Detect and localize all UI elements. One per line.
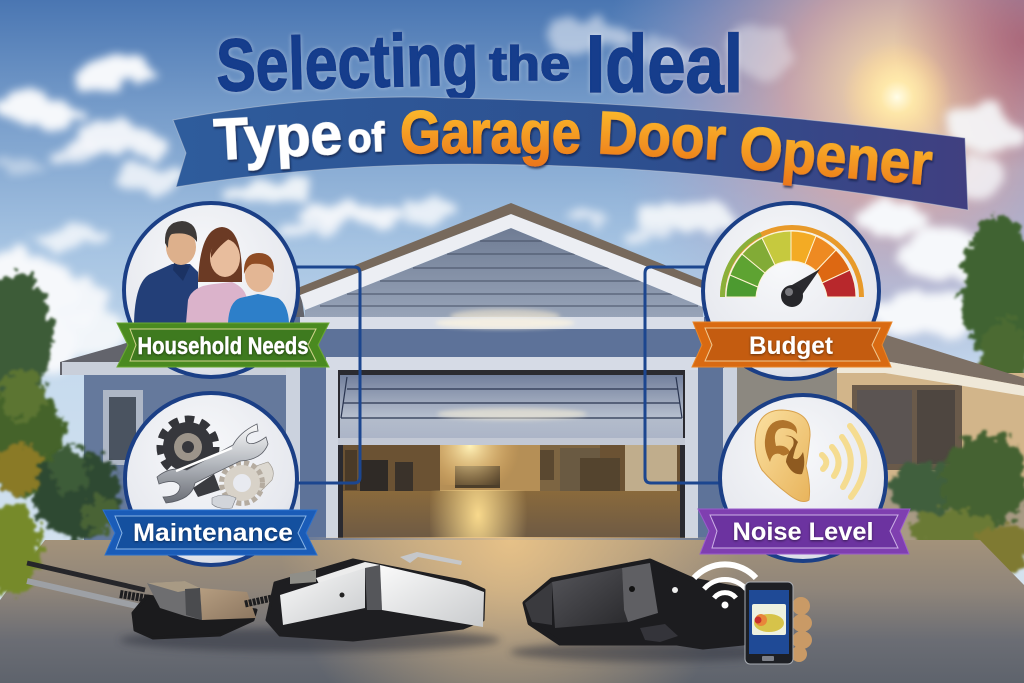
boy (228, 253, 289, 323)
hand fingers (791, 597, 812, 662)
sound waves (822, 426, 864, 497)
wrench (157, 424, 268, 503)
small silver cog (212, 462, 273, 508)
side panel (552, 568, 628, 628)
title: selecting the ideal: the (489, 38, 570, 91)
circle: noise level (720, 395, 886, 561)
label: Maintenance (133, 519, 293, 547)
banner title text: Opener (737, 114, 935, 198)
opener: chain drive with rails (27, 552, 484, 640)
opener: smart wifi unit (525, 561, 812, 664)
gear and wrench icon (157, 420, 273, 508)
ribbon: maintenance (103, 510, 317, 555)
light panel (622, 563, 658, 622)
end cap (525, 582, 552, 625)
opener shadows (120, 628, 790, 662)
title: selecting the ideal (215, 17, 743, 110)
label: Budget (749, 332, 834, 360)
ribbon banner (173, 97, 968, 210)
circle: household needs (124, 203, 298, 377)
circle: maintenance (125, 393, 297, 565)
woman (186, 227, 247, 323)
man (134, 221, 198, 323)
rails (27, 563, 167, 609)
connector lines (295, 267, 722, 483)
title: selecting the ideal: Selecting (215, 17, 479, 107)
trim bands (300, 317, 704, 370)
family illustration (134, 221, 289, 323)
gable roof (300, 203, 703, 310)
banner title text: Type (212, 101, 344, 173)
ribbon: budget (692, 322, 892, 367)
needle (781, 269, 820, 307)
bushes right (891, 434, 1024, 572)
gable siding (305, 228, 703, 323)
smartphone (745, 582, 793, 664)
ribbon: household needs (117, 323, 329, 367)
right wing (702, 282, 1024, 542)
banner title text (212, 99, 935, 198)
label: Household Needs (138, 333, 308, 360)
dark rack (193, 474, 220, 497)
title: selecting the ideal: Ideal (586, 19, 743, 110)
garage door opening (338, 370, 685, 538)
outer rim (720, 225, 864, 297)
ear icon (755, 410, 810, 502)
foreground bush left (34, 448, 122, 539)
banner title text: Garage (400, 99, 581, 166)
black body (525, 561, 743, 647)
background tree right (956, 216, 1024, 493)
banner title text: of (347, 114, 386, 161)
bush bottom left (0, 504, 42, 596)
circle: budget (703, 203, 879, 379)
clouds (0, 19, 1021, 383)
raised door panels (338, 375, 685, 445)
gauge segments (726, 231, 856, 297)
ribbon: noise level (698, 509, 910, 554)
label: Noise Level (732, 518, 874, 546)
garage interior (343, 445, 680, 538)
large white unit (267, 552, 484, 640)
driveway (0, 537, 1024, 683)
banner title text: Door (596, 99, 728, 173)
left wing (60, 287, 305, 545)
garage pillars (286, 317, 737, 542)
gauge icon (720, 225, 864, 307)
wifi symbol (694, 564, 756, 608)
dark gear (161, 420, 215, 474)
background tree left (0, 272, 64, 498)
small unit (133, 581, 272, 638)
